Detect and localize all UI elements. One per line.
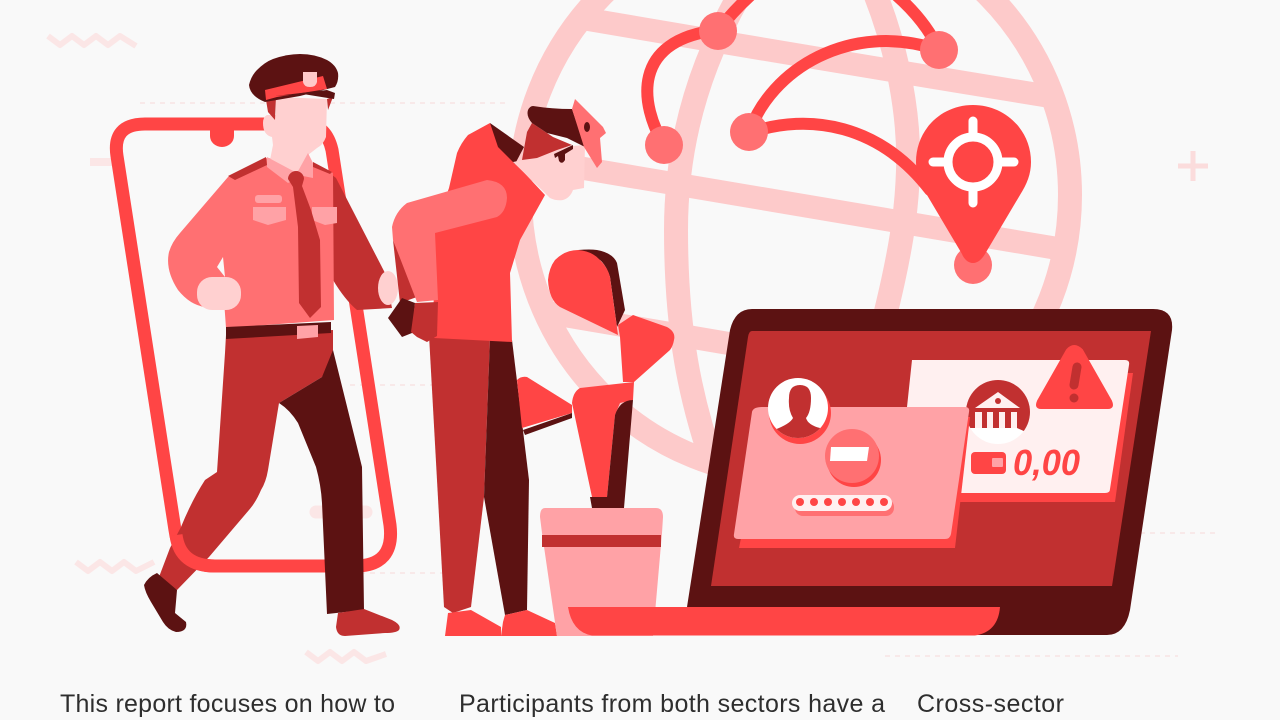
icon: user avatar (768, 378, 831, 444)
laptop screen (711, 331, 1151, 586)
background decorations (48, 36, 1220, 661)
laptop base (568, 607, 1000, 636)
network routes (647, 0, 939, 190)
back card (907, 360, 1133, 502)
officer front leg (159, 330, 333, 590)
upper leaf (548, 250, 618, 335)
officer front shoe (336, 609, 400, 636)
upper stem (578, 250, 625, 327)
text column 2: Participants from both sectors have a (459, 690, 885, 718)
man shoes (445, 610, 557, 636)
officer arm gap (217, 257, 225, 277)
text column 3: Cross-sector (917, 690, 1064, 718)
centre stem (590, 400, 633, 508)
officer right arm (332, 175, 392, 310)
pot band (542, 535, 661, 547)
officer back leg (279, 350, 364, 614)
icon: stop sign (825, 429, 881, 487)
officer belt buckle (297, 325, 318, 339)
officer epaulettes (228, 157, 332, 180)
man dark hand (388, 298, 415, 337)
front card (734, 407, 970, 548)
officer neck and face (263, 97, 327, 174)
warning triangle (1037, 346, 1112, 408)
man cuff (411, 302, 438, 342)
man eye line (554, 145, 573, 163)
man collar (490, 123, 524, 164)
man sleeve (392, 180, 507, 302)
centre leaf (572, 382, 634, 497)
officer fist (197, 277, 241, 310)
arrested man (388, 99, 606, 636)
officer pockets (253, 207, 337, 225)
officer cap (249, 54, 338, 102)
officer hair (266, 97, 333, 120)
officer hand (378, 271, 398, 305)
laptop body (687, 309, 1172, 635)
phone frame (116, 124, 391, 566)
left leaf (517, 377, 572, 428)
right leaf (618, 315, 674, 382)
man mask (572, 99, 606, 168)
officer pocket button (255, 195, 282, 203)
icon: location pin (916, 105, 1031, 263)
globe (510, 0, 1090, 476)
officer collar (267, 153, 313, 183)
phone corner over leg (176, 535, 240, 566)
potted plant (517, 250, 674, 636)
icon: bank (966, 380, 1030, 444)
pot (540, 508, 663, 636)
password field (792, 495, 894, 516)
man front leg (429, 335, 490, 613)
balance amount: 0,00 (1013, 442, 1080, 483)
man forearm (393, 240, 417, 303)
man hair (522, 123, 572, 160)
man back leg (484, 338, 529, 615)
officer belt (226, 322, 331, 339)
officer shirt (168, 158, 334, 328)
police officer (144, 54, 400, 636)
officer rear foot (144, 573, 186, 632)
man torso (433, 123, 545, 342)
man cap (528, 106, 585, 147)
text column 1: This report focuses on how to (60, 690, 395, 718)
laptop (568, 309, 1172, 636)
icon: wallet (971, 452, 1006, 474)
man face (513, 145, 585, 200)
left stem (523, 413, 572, 435)
man mask eye (584, 122, 590, 132)
officer tie (288, 171, 321, 318)
network nodes (645, 12, 992, 284)
